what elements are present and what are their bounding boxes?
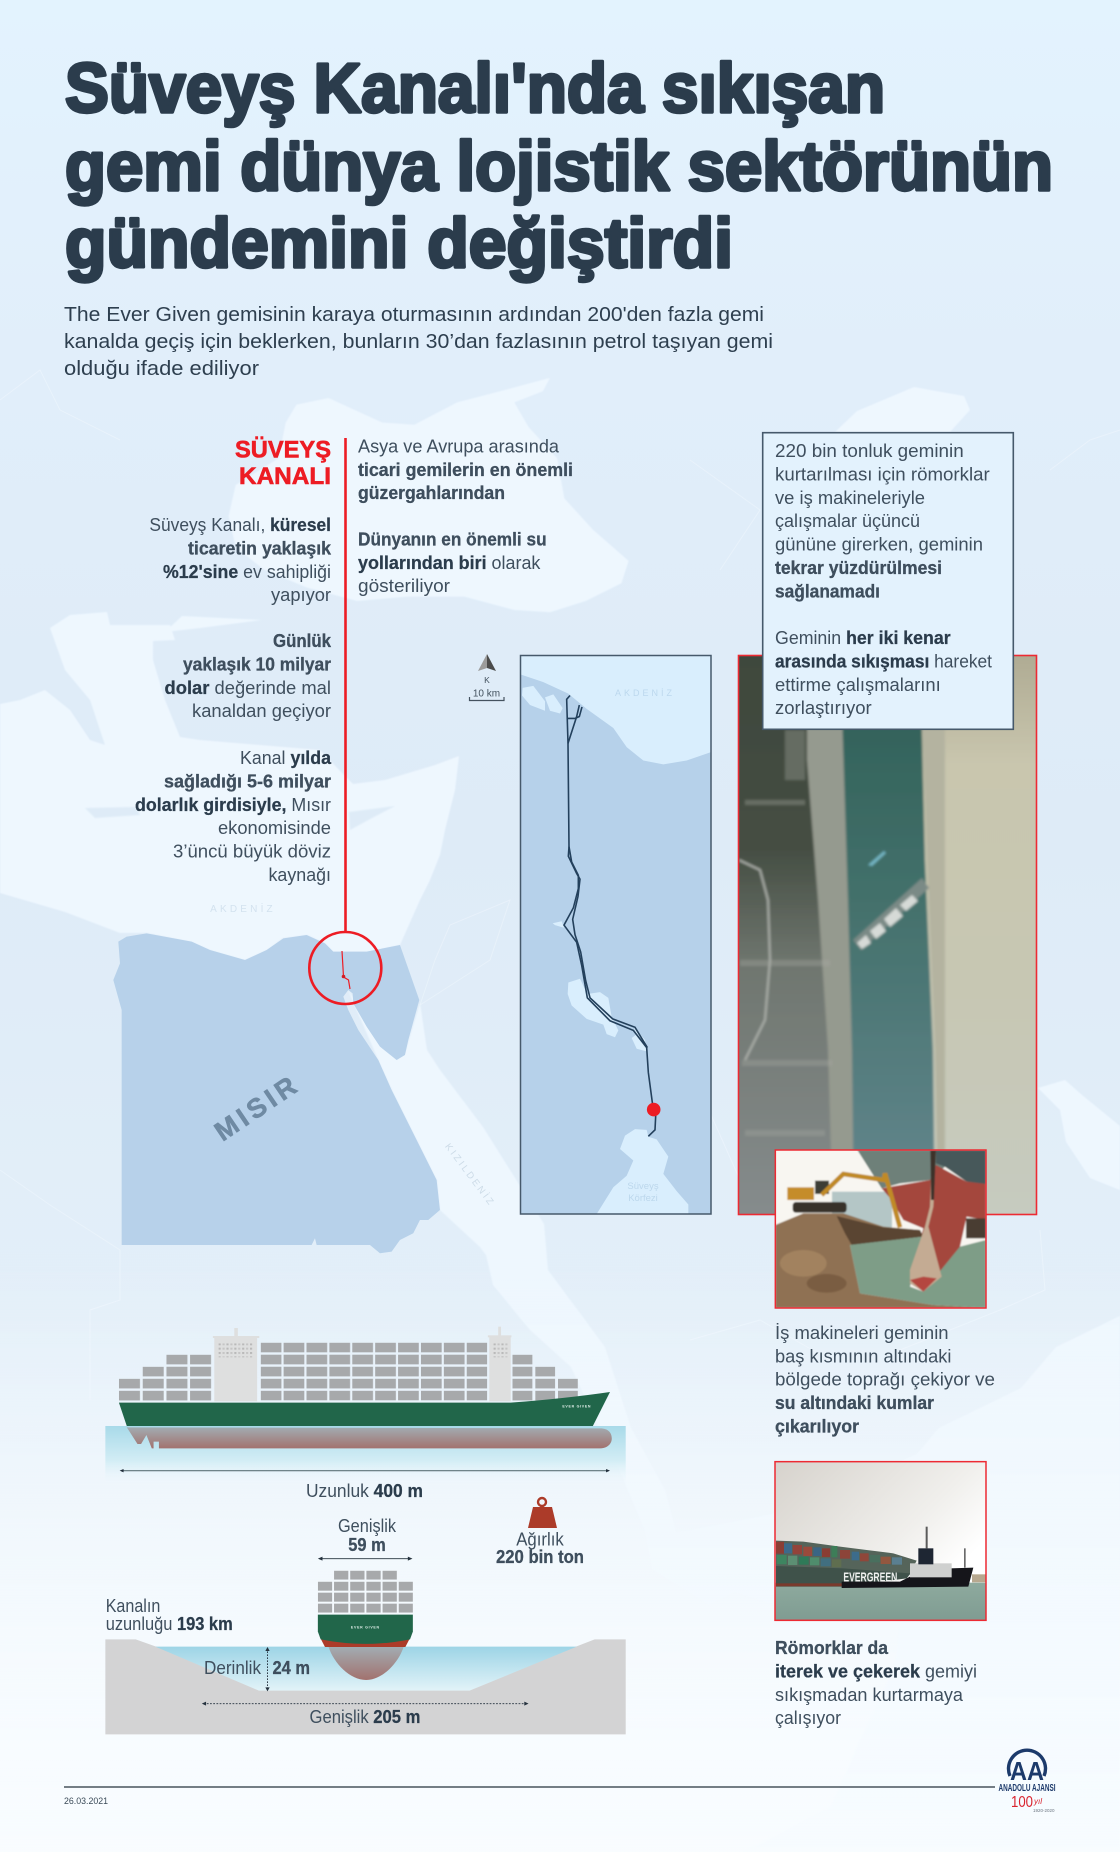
label: canal width: Genişlik 205 m [310,1707,420,1727]
callout box: rescue status: gününe girerken, geminin [775,535,983,555]
subtitle [64,304,773,380]
text block: left facts: Kanal yılda [240,748,332,768]
channel ground [105,1639,626,1734]
icon: north arrow and scale bar [470,654,504,700]
callout box: rescue status: sağlanamadı [775,581,880,601]
label: canal length: uzunluğu 193 km [106,1614,233,1634]
logo: Anadolu Ajansı: yıl [1033,1797,1042,1806]
label: weight: Ağırlık [516,1530,565,1550]
logo: Anadolu Ajansı: ANADOLU AJANSI [998,1783,1056,1794]
containers [318,1571,413,1613]
text block: route importance: ticari gemilerin en önemli [358,460,573,480]
title: gündemini değiştirdi [65,204,733,282]
text block: left facts: %12'sine ev sahipliği [163,562,331,582]
label: Mısır: MISIR [209,1071,302,1147]
superstructure [213,1327,511,1401]
photo: satellite image of canal [730,650,1050,1220]
text block: left facts: ekonomisinde [218,818,331,838]
photo: tugboat beside container ship: EVERGREEN [843,1569,897,1584]
caption: tugboats: Römorklar da [775,1638,889,1658]
caption: excavators [775,1323,995,1436]
heading: Süveyş Kanalı [235,436,331,490]
callout box: rescue status: kurtarılması için römorklar [775,464,990,484]
text block: left facts: kanaldan geçiyor [192,701,331,721]
heading: Süveyş Kanalı: KANALI [239,463,331,490]
text block: route importance: gösteriliyor [358,576,450,596]
callout box: rescue status: zorlaştırıyor [775,698,872,718]
underwater hull [127,1427,612,1448]
text block: route importance: güzergahlarından [358,483,505,503]
caption: excavators: İş makineleri geminin [775,1323,949,1343]
label: ship width [338,1516,397,1555]
arrow: canal width [202,1702,529,1706]
diagram: ship side view [105,1327,626,1484]
text block: left facts: sağladığı 5-6 milyar [164,772,331,792]
Mediterranean area [521,655,711,764]
text block: left facts: ticaretin yaklaşık [188,538,332,558]
canal lines [564,695,656,1136]
caption: excavators: baş kısmının altındaki [775,1346,951,1366]
heading: Süveyş Kanalı: SÜVEYŞ [235,436,331,464]
caption: tugboats [775,1638,977,1728]
text block: left facts: kaynağı [268,865,331,885]
icon: north arrow and scale bar: K [484,675,490,685]
photo: tugboat beside container ship [773,1460,988,1621]
water [105,1426,626,1484]
map frame [520,656,711,1214]
label: Süveyş Körfezi: Süveyş [627,1181,659,1192]
red leader line and locator circle [309,438,381,1004]
logo: Anadolu Ajansı: 1920-2020 [1033,1808,1055,1813]
icon: weight [528,1498,557,1528]
containers [119,1343,578,1401]
arrow: depth [265,1647,270,1691]
diagram: canal cross-section with ship [105,1557,626,1734]
callout box: rescue status: ettirme çalışmalarını [775,675,941,695]
arrow: length [120,1469,610,1472]
label: Süveyş Körfezi [627,1181,659,1204]
subtitle: The Ever Given gemisinin karaya oturmasının ardından 200'den fazla gemi [64,304,764,326]
footer rule [64,1786,995,1788]
subtitle: olduğu ifade ediliyor [64,358,259,380]
caption: excavators: çıkarılıyor [775,1416,859,1436]
text block: left facts: yapıyor [271,585,331,605]
label: depth: Derinlik [204,1658,262,1678]
arrow: ship width [318,1557,412,1561]
map labels: AKDENİZ [615,688,675,698]
underwater hull [329,1647,404,1680]
label: length: Uzunluk 400 m [306,1481,423,1501]
panel: canal route map [520,655,711,1214]
hull [119,1392,610,1426]
label: ship width: Genişlik [338,1516,397,1536]
text block: route importance: Asya ve Avrupa arasında [358,436,560,456]
text block: left facts [135,515,332,885]
callout box: rescue status: ve iş makineleriyle [775,488,925,508]
caption: excavators: bölgede toprağı çekiyor ve [775,1370,995,1390]
hull [320,1637,411,1647]
label: Süveyş Körfezi: Körfezi [628,1193,658,1204]
caption: excavators: su altındaki kumlar [775,1393,934,1413]
marker: grounding location [647,1103,660,1116]
callout box: rescue status: 220 bin tonluk geminin [775,441,964,461]
ship name: EVER GIVEN [351,1626,380,1630]
label: weight [496,1530,584,1567]
text block: route importance: yollarından biri olarak [358,553,541,573]
ship name: EVER GIVEN [562,1404,591,1408]
label: ship width: 59 m [348,1535,386,1555]
label: Akdeniz: AKDENİZ [210,902,276,915]
callout box: rescue status: Geminin her iki kenar [775,628,951,648]
callout box: rescue status [763,433,1013,729]
text block: left facts: Süveyş Kanalı, küresel [149,515,331,535]
label: Kızıldeniz: KIZILDENİZ [442,1142,497,1209]
text block: left facts: 3’üncü büyük döviz [173,842,331,862]
text block: left facts: Günlük [273,631,332,651]
text block: left facts: dolar değerinde mal [164,678,331,698]
lakes [522,686,688,1214]
callout box: rescue status: tekrar yüzdürülmesi [775,558,942,578]
text block: route importance [358,436,573,596]
callout box: rescue status: çalışmalar üçüncü [775,511,920,531]
title: gemi dünya lojistik sektörünün [65,127,1053,205]
title [65,49,1053,282]
callout box: rescue status: arasında sıkışması hareket [775,651,992,671]
label: canal length: Kanalın [106,1596,160,1616]
label: canal length [106,1596,233,1634]
date: 26.03.2021 [64,1796,108,1807]
title: Süveyş Kanalı'nda sıkışan [65,49,885,127]
label: weight: 220 bin ton [496,1547,584,1567]
logo: Anadolu Ajansı [998,1750,1056,1813]
text block: route importance: Dünyanın en önemli su [358,530,547,550]
caption: tugboats: çalışıyor [775,1708,841,1728]
photo: excavator at ship bow [773,1148,988,1310]
map: Egypt [113,933,440,1253]
label: depth: 24 m [272,1658,310,1678]
water [155,1647,577,1691]
logo: Anadolu Ajansı: 100 [1011,1794,1033,1811]
subtitle: kanalda geçiş için beklerken, bunların 30’dan fazlasının petrol taşıyan gemi [64,331,773,353]
caption: tugboats: iterek ve çekerek gemiyi [775,1662,977,1682]
label: depth [204,1658,310,1678]
text block: left facts: dolarlık girdisiyle, Mısır [135,795,331,815]
text block: left facts: yaklaşık 10 milyar [183,654,331,674]
logo: Anadolu Ajansı: AA [1010,1756,1044,1786]
caption: tugboats: sıkışmadan kurtarmaya [775,1685,964,1705]
icon: north arrow and scale bar: 10 km [473,688,500,700]
